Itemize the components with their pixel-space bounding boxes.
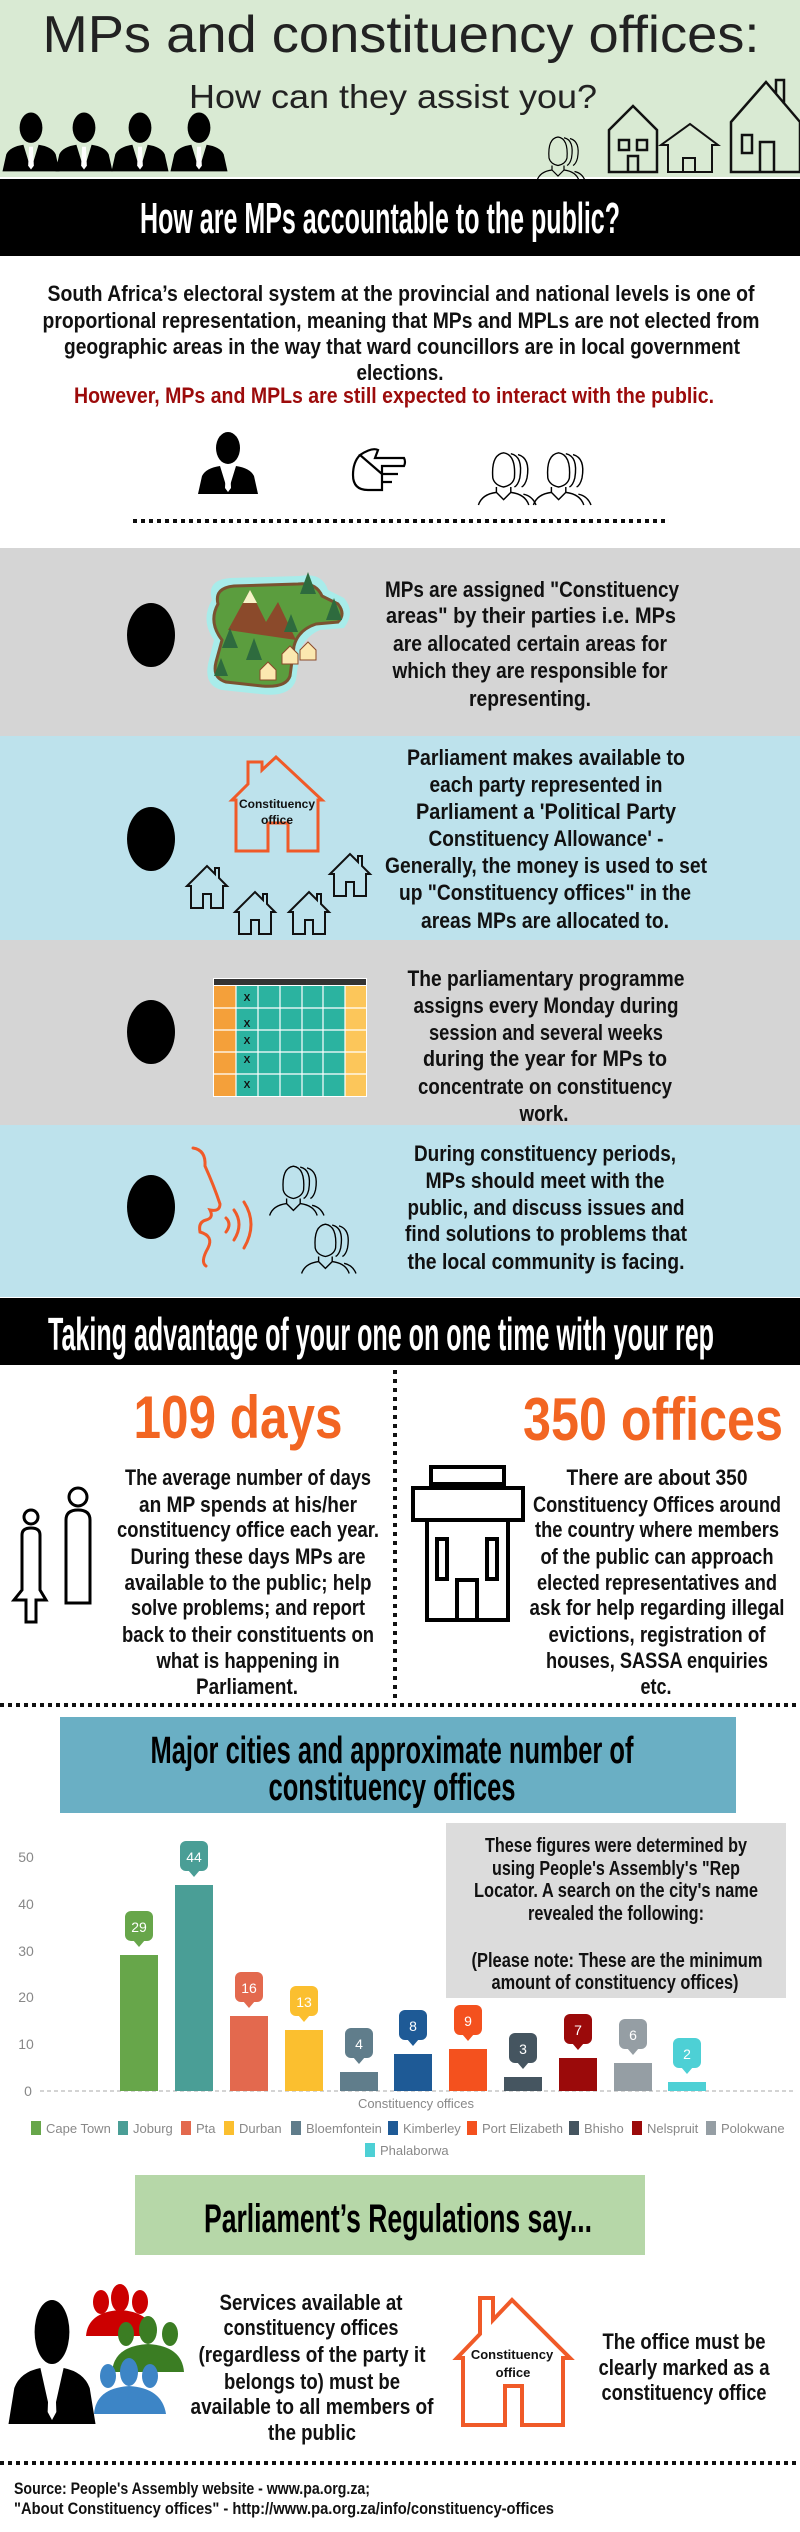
bullet: [127, 1175, 175, 1239]
heading box: major cities: constituency offices: [268, 1767, 516, 1809]
y axis labels: 50: [18, 1849, 34, 1865]
text: which they are responsible for: [392, 658, 668, 683]
text: The parliamentary programme: [408, 966, 684, 991]
heading box: major cities: [60, 1717, 736, 1813]
icon: constituency office house: office: [496, 2365, 530, 2380]
panel: party constituency allowance: [0, 736, 800, 940]
value bubbles: 2: [683, 2046, 691, 2062]
legend: Bloemfontein: [306, 2121, 382, 2136]
source footer: Source: People's Assembly website - www.pa.org.za;: [14, 2479, 370, 2498]
text: back to their constituents on: [122, 1622, 374, 1647]
text: During these days MPs are: [130, 1544, 366, 1569]
text: Parliament a 'Political Party: [416, 799, 677, 824]
regulation: clearly marked office: [457, 2298, 770, 2425]
text: constituency office: [602, 2380, 766, 2405]
bullet: [127, 603, 175, 667]
intro paragraph: elections.: [356, 360, 444, 385]
header panel: [0, 0, 800, 180]
legend: Nelspruit: [647, 2121, 699, 2136]
title: MPs and constituency offices:: [42, 6, 760, 64]
text: [385, 577, 680, 711]
text: constituency offices: [224, 2315, 398, 2340]
y axis labels: 10: [18, 2036, 34, 2052]
bullet: [127, 1000, 175, 1064]
icon: speaking face: [193, 1148, 251, 1266]
text: [408, 966, 684, 1126]
text: available to the public; help: [124, 1570, 372, 1595]
text: concentrate on constituency: [418, 1074, 673, 1099]
source footer: "About Constituency offices" - http://www.pa.org.za/info/constituency-offices: [14, 2499, 554, 2518]
text: (regardless of the party it: [198, 2342, 426, 2367]
value bubbles: 4: [355, 2036, 363, 2052]
stat: 109 days: [14, 1384, 379, 1699]
icon: office building: [413, 1467, 523, 1620]
icons row: MP points to public: [198, 432, 591, 505]
legend: Polokwane: [721, 2121, 785, 2136]
text: areas" by their parties i.e. MPs: [386, 603, 676, 628]
regulation: services for all: [8, 2284, 434, 2445]
value bubbles: 44: [186, 1849, 202, 1865]
icon: calendar: [213, 978, 367, 1097]
stat: 350 offices: [413, 1386, 784, 1699]
callout: chart note: revealed the following:: [528, 1903, 704, 1925]
text: Parliament.: [196, 1674, 298, 1699]
value bubbles: 7: [574, 2022, 582, 2038]
big number: 109 days: [134, 1384, 342, 1451]
text: available to all members of: [190, 2394, 434, 2419]
legend: Kimberley: [403, 2121, 461, 2136]
callout: chart note: amount of constituency offices): [492, 1972, 738, 1994]
text: MPs should meet with the: [426, 1168, 664, 1193]
text: session and several weeks: [429, 1020, 663, 1045]
text: the local community is facing.: [408, 1249, 684, 1274]
text: constituency office each year.: [117, 1517, 379, 1542]
icon: constituency office house: [457, 2298, 570, 2425]
value bubbles: 16: [241, 1980, 257, 1996]
legend: Phalaborwa: [380, 2143, 449, 2158]
text: [598, 2329, 770, 2405]
callout: chart note: These figures were determined by: [485, 1835, 748, 1857]
legend: Port Elizabeth: [482, 2121, 563, 2136]
text: [117, 1465, 379, 1699]
text: find solutions to problems that: [405, 1221, 688, 1246]
subtitle: How can they assist you?: [189, 78, 597, 115]
text: are allocated certain areas for: [393, 631, 667, 656]
icon: calendar: X: [244, 993, 251, 1004]
icon: audience: [270, 1166, 356, 1274]
text: Services available at: [220, 2290, 403, 2315]
value bubbles: 6: [629, 2027, 637, 2043]
text: the public: [268, 2420, 356, 2445]
legend: Joburg: [133, 2121, 173, 2136]
y axis labels: [18, 1849, 34, 2099]
text: [385, 745, 708, 933]
value bubbles: [125, 1841, 701, 2074]
icon: public group: [478, 453, 591, 505]
icon: calendar: X: [244, 1036, 251, 1047]
text: [530, 1465, 784, 1699]
text: public, and discuss issues and: [408, 1195, 684, 1220]
text: Parliament makes available to: [407, 745, 685, 770]
source footer: [14, 2479, 554, 2518]
text: during the year for MPs to: [423, 1046, 667, 1071]
text: representing.: [469, 686, 591, 711]
icon: people and houses: [537, 80, 800, 180]
icon: calendar: X: [244, 1080, 251, 1091]
callout: chart note: [446, 1823, 786, 1998]
icon: MP silhouettes: [2, 112, 227, 171]
panel: constituency areas: [0, 548, 800, 736]
icon: calendar: X: [244, 1019, 251, 1030]
y axis labels: 30: [18, 1943, 34, 1959]
heading box: regulations: Parliament’s Regulations say...: [204, 2197, 592, 2241]
text: During constituency periods,: [414, 1141, 676, 1166]
text: solve problems; and report: [131, 1595, 366, 1620]
text: Generally, the money is used to set: [385, 853, 708, 878]
heading box: regulations: [135, 2175, 645, 2255]
panel: meeting the public: [0, 1125, 800, 1297]
heading band: accountability: [0, 179, 800, 256]
text: work.: [519, 1101, 568, 1126]
text: There are about 350: [566, 1465, 748, 1490]
bars: [120, 1885, 706, 2091]
text: up "Constituency offices" in the: [399, 880, 691, 905]
icon: constituency office house: [187, 757, 370, 934]
text: The office must be: [602, 2329, 766, 2354]
text: Constituency Allowance' -: [428, 826, 664, 851]
bullet: [127, 807, 175, 871]
value bubbles: 3: [519, 2041, 527, 2057]
text: evictions, registration of: [548, 1622, 766, 1647]
icon: MP: [198, 432, 258, 494]
text: [405, 1141, 688, 1274]
text: The average number of days: [125, 1465, 371, 1490]
text: assigns every Monday during: [414, 993, 678, 1018]
text: belongs to) must be: [224, 2369, 400, 2394]
intro paragraph: [42, 281, 760, 408]
icon: constituency office house: Constituency: [239, 797, 315, 811]
value bubbles: 8: [409, 2018, 417, 2034]
icon: constituency office house: Constituency: [471, 2347, 554, 2362]
icon: pointing hand: [353, 449, 405, 490]
panel: parliamentary programme: [0, 940, 800, 1126]
text: MPs are assigned "Constituency: [385, 577, 680, 602]
icon: island: [206, 572, 350, 695]
callout: chart note: using People's Assembly's "Rep: [492, 1858, 740, 1880]
legend: Bhisho: [584, 2121, 624, 2136]
value bubbles: 9: [464, 2013, 472, 2029]
text: clearly marked as a: [598, 2355, 770, 2380]
value bubbles: 13: [296, 1994, 312, 2010]
text: each party represented in: [430, 772, 662, 797]
text: areas MPs are allocated to.: [421, 908, 669, 933]
legend: Cape Town: [46, 2121, 111, 2136]
y axis labels: 40: [18, 1896, 34, 1912]
y axis labels: 0: [24, 2083, 32, 2099]
icon: constituency office house: office: [261, 813, 293, 827]
legend: [31, 2121, 785, 2158]
text: an MP spends at his/her: [139, 1492, 357, 1517]
highlight sentence: However, MPs and MPLs are still expected to interact with the public.: [74, 383, 714, 408]
icon: calendar: X: [244, 1055, 251, 1066]
icon: two people: [14, 1488, 90, 1622]
legend: Pta: [196, 2121, 216, 2136]
bar chart: constituency offices by city: [18, 1841, 795, 2158]
y axis labels: 20: [18, 1989, 34, 2005]
legend: Durban: [239, 2121, 282, 2136]
value bubbles: 29: [131, 1919, 147, 1935]
text: what is happening in: [156, 1648, 340, 1673]
axis title: Constituency offices: [358, 2096, 475, 2111]
icon: MP and party groups: [8, 2284, 184, 2424]
text: etc.: [640, 1674, 672, 1699]
text: [190, 2290, 434, 2445]
